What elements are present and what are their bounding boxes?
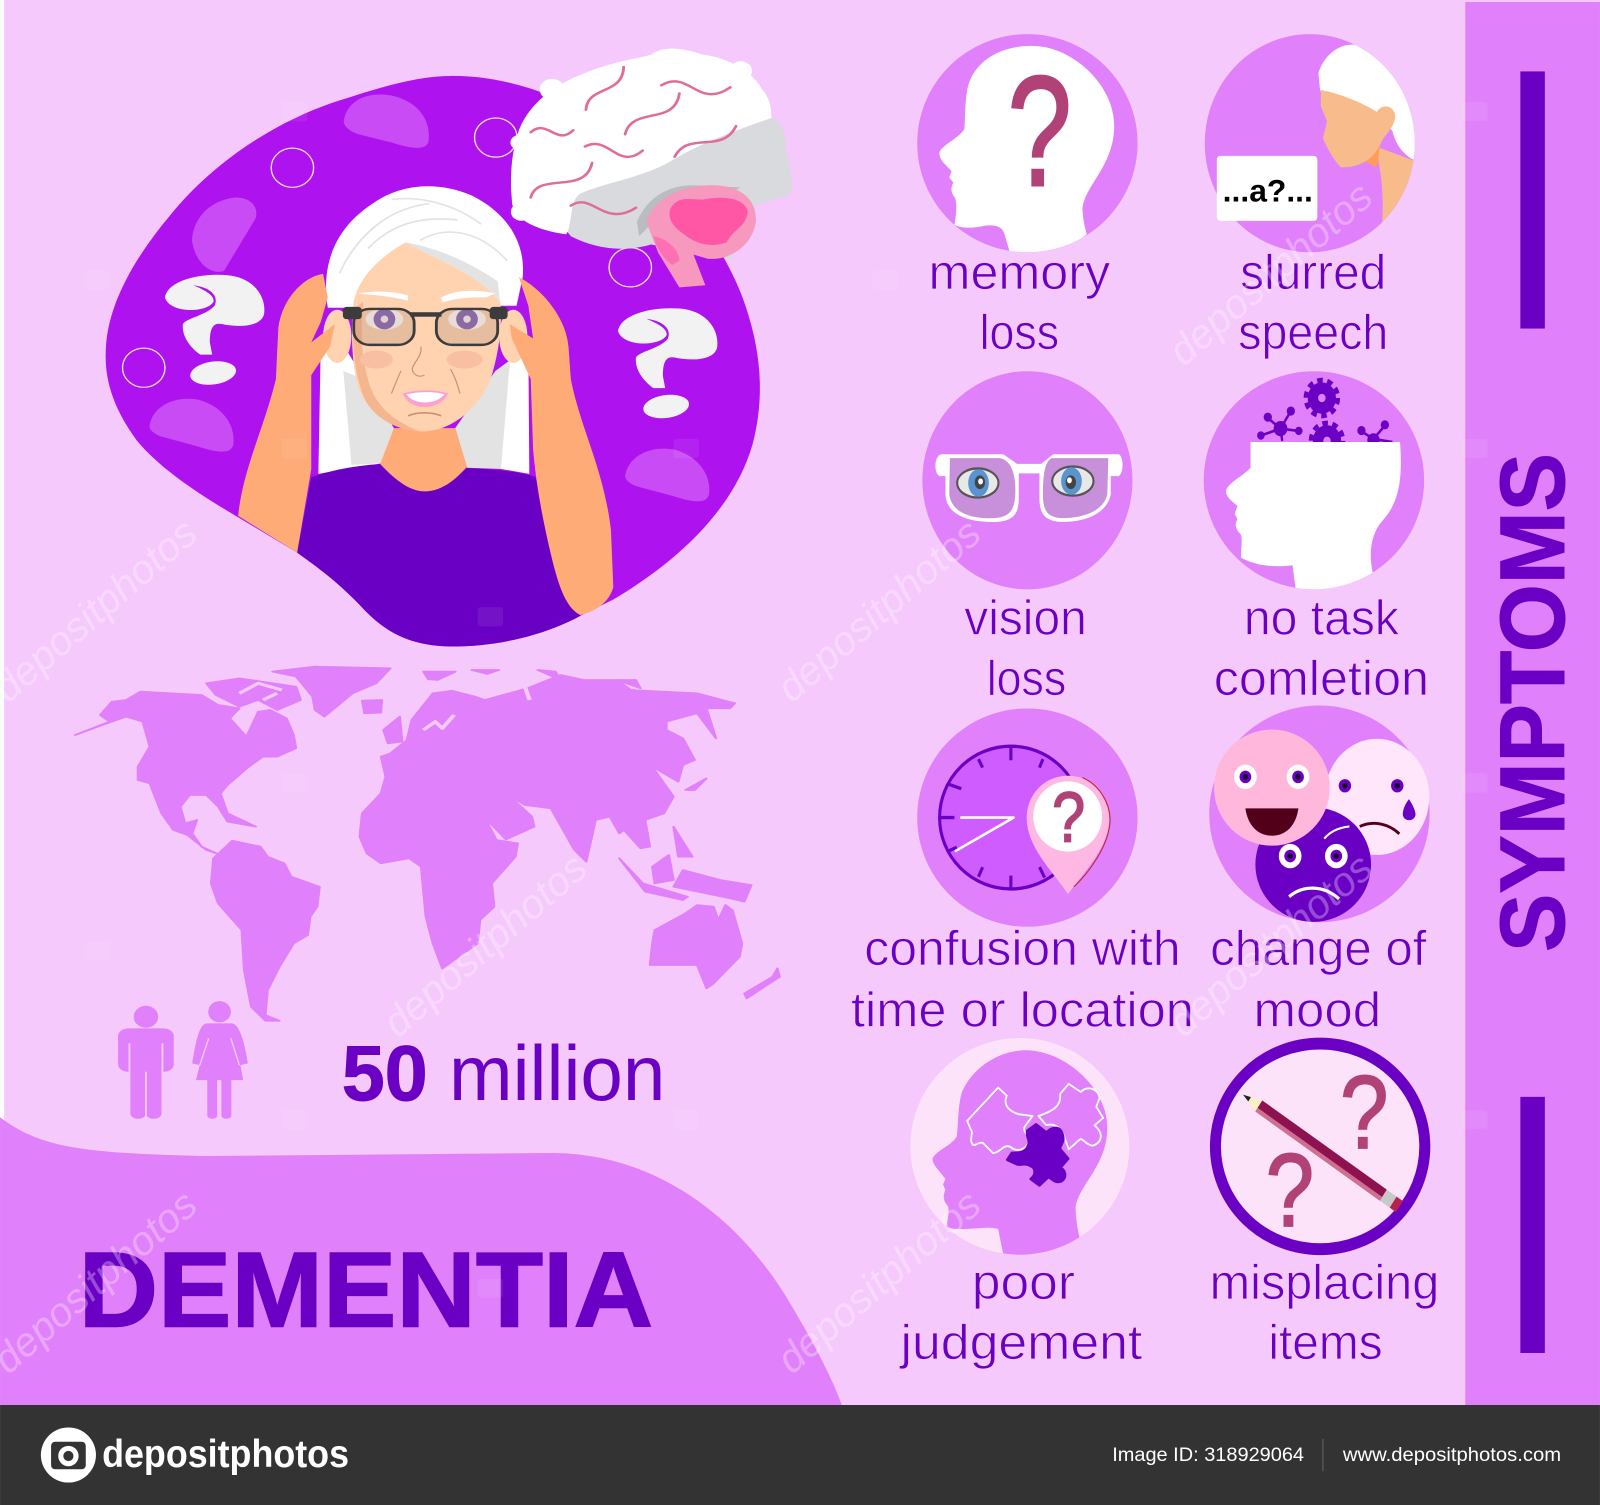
icon: misplacing items: ? (1266, 1134, 1314, 1249)
icon: misplacing items (1215, 1044, 1425, 1249)
question bubble left (165, 275, 264, 388)
symptom label: misplacing items: items (1268, 1316, 1383, 1370)
symptom label: slurred speech: speech (1238, 306, 1388, 360)
world map (75, 667, 780, 1119)
ears (323, 310, 351, 363)
iceland (362, 700, 382, 713)
australia (650, 905, 742, 988)
watermarks: depositphotos (1159, 844, 1381, 1045)
icon: man (118, 1006, 174, 1119)
symptom label: confusion: confusion with (864, 922, 1181, 976)
footer logo: depositphotos (102, 1433, 349, 1476)
panel: lower symptom icons (910, 706, 1430, 1256)
watermarks: depositphotos (374, 844, 596, 1045)
glasses (343, 307, 508, 345)
image id: Image ID: 318929064 (1112, 1444, 1304, 1466)
icon: memory loss: ? (1007, 44, 1072, 219)
icon: poor judgement (910, 1038, 1129, 1256)
symptom label: confusion: time or location (851, 983, 1194, 1037)
panel: top symptom icons (917, 34, 1424, 594)
symptom label: no task completion: comletion (1214, 652, 1429, 706)
icon: slurred speech (1205, 34, 1423, 252)
borneo (652, 855, 674, 883)
panel: symptoms side bar: SYMPTOMS (1482, 453, 1584, 952)
statistic: 50 million (342, 1031, 665, 1117)
south america (211, 841, 320, 1021)
north america (75, 692, 296, 854)
eyes (366, 309, 486, 330)
british isles (383, 717, 402, 743)
symptom label: confusion (851, 922, 1194, 1037)
symptom label: poor judgement: poor (972, 1256, 1075, 1310)
statistic: 50 million: million (449, 1031, 665, 1117)
arctic islands (206, 678, 301, 710)
greenland (272, 667, 390, 717)
bottom title panel (0, 1117, 842, 1405)
face (352, 242, 501, 431)
symptom label: slurred speech (1238, 246, 1388, 360)
arms and hands (238, 274, 613, 615)
symptom label: change of mood: change of (1210, 922, 1427, 976)
watermarks: depositphotos (768, 509, 989, 711)
icon: misplacing items: ? (1340, 1056, 1388, 1171)
philippines (674, 827, 692, 857)
symptom label: change of mood: mood (1254, 983, 1381, 1037)
hair top (326, 186, 523, 308)
symptom label: change of mood (1210, 922, 1427, 1037)
symptom label: vision loss (964, 592, 1087, 706)
watermarks: depositphotos (768, 1181, 989, 1382)
symptom label: poor judgement: judgement (898, 1316, 1143, 1370)
watermarks: depositphotos (1159, 173, 1381, 374)
question bubble right (618, 308, 717, 421)
symptom label: no task completion: no task (1244, 592, 1399, 646)
symptom label: vision loss: loss (987, 652, 1066, 706)
title: DEMENTIA: DEMENTIA (79, 1229, 653, 1349)
thin circles (123, 118, 652, 387)
statistic: 50 million: 50 (342, 1031, 428, 1117)
icon: slurred speech: ...a?... (1223, 174, 1313, 209)
icon: mood change (1209, 706, 1430, 922)
icon: woman (192, 1001, 248, 1119)
japan (685, 778, 707, 790)
northern islands (423, 670, 640, 688)
symptom label: slurred speech: slurred (1240, 246, 1386, 300)
dress (297, 464, 580, 646)
new zealand (744, 968, 780, 998)
symptom label: memory loss: loss (980, 306, 1059, 360)
hair back (318, 347, 529, 474)
icon: no task completion (1204, 371, 1424, 594)
watermarks (0, 102, 1488, 1382)
icon: memory loss (917, 34, 1138, 255)
symptom label: vision loss: vision (964, 592, 1087, 646)
footer logo (41, 1427, 349, 1483)
new guinea (674, 870, 751, 902)
symptom label: memory loss (929, 246, 1111, 360)
eurasia and africa (360, 675, 735, 968)
symptom label: misplacing items: misplacing (1210, 1256, 1439, 1310)
baltic sea gap (239, 680, 530, 730)
symptom label: misplacing items (1210, 1256, 1439, 1370)
symptom label: poor judgement (898, 1256, 1143, 1370)
decorative soft shapes (150, 94, 709, 501)
symptom label: memory loss: memory (929, 246, 1111, 300)
icon: time confusion: ? (1052, 778, 1085, 857)
sumatra and java (619, 858, 688, 900)
panel: hero illustration (106, 48, 792, 646)
icon: vision loss (922, 371, 1132, 589)
brain (510, 48, 792, 287)
footer bar (0, 1405, 1600, 1505)
purple blob (106, 76, 760, 646)
icon: time confusion (917, 708, 1138, 927)
panel: symptoms side bar (1465, 2, 1600, 1405)
symptom label: no task completion (1214, 592, 1429, 706)
site url: www.depositphotos.com (1342, 1444, 1561, 1466)
neck (380, 428, 467, 491)
